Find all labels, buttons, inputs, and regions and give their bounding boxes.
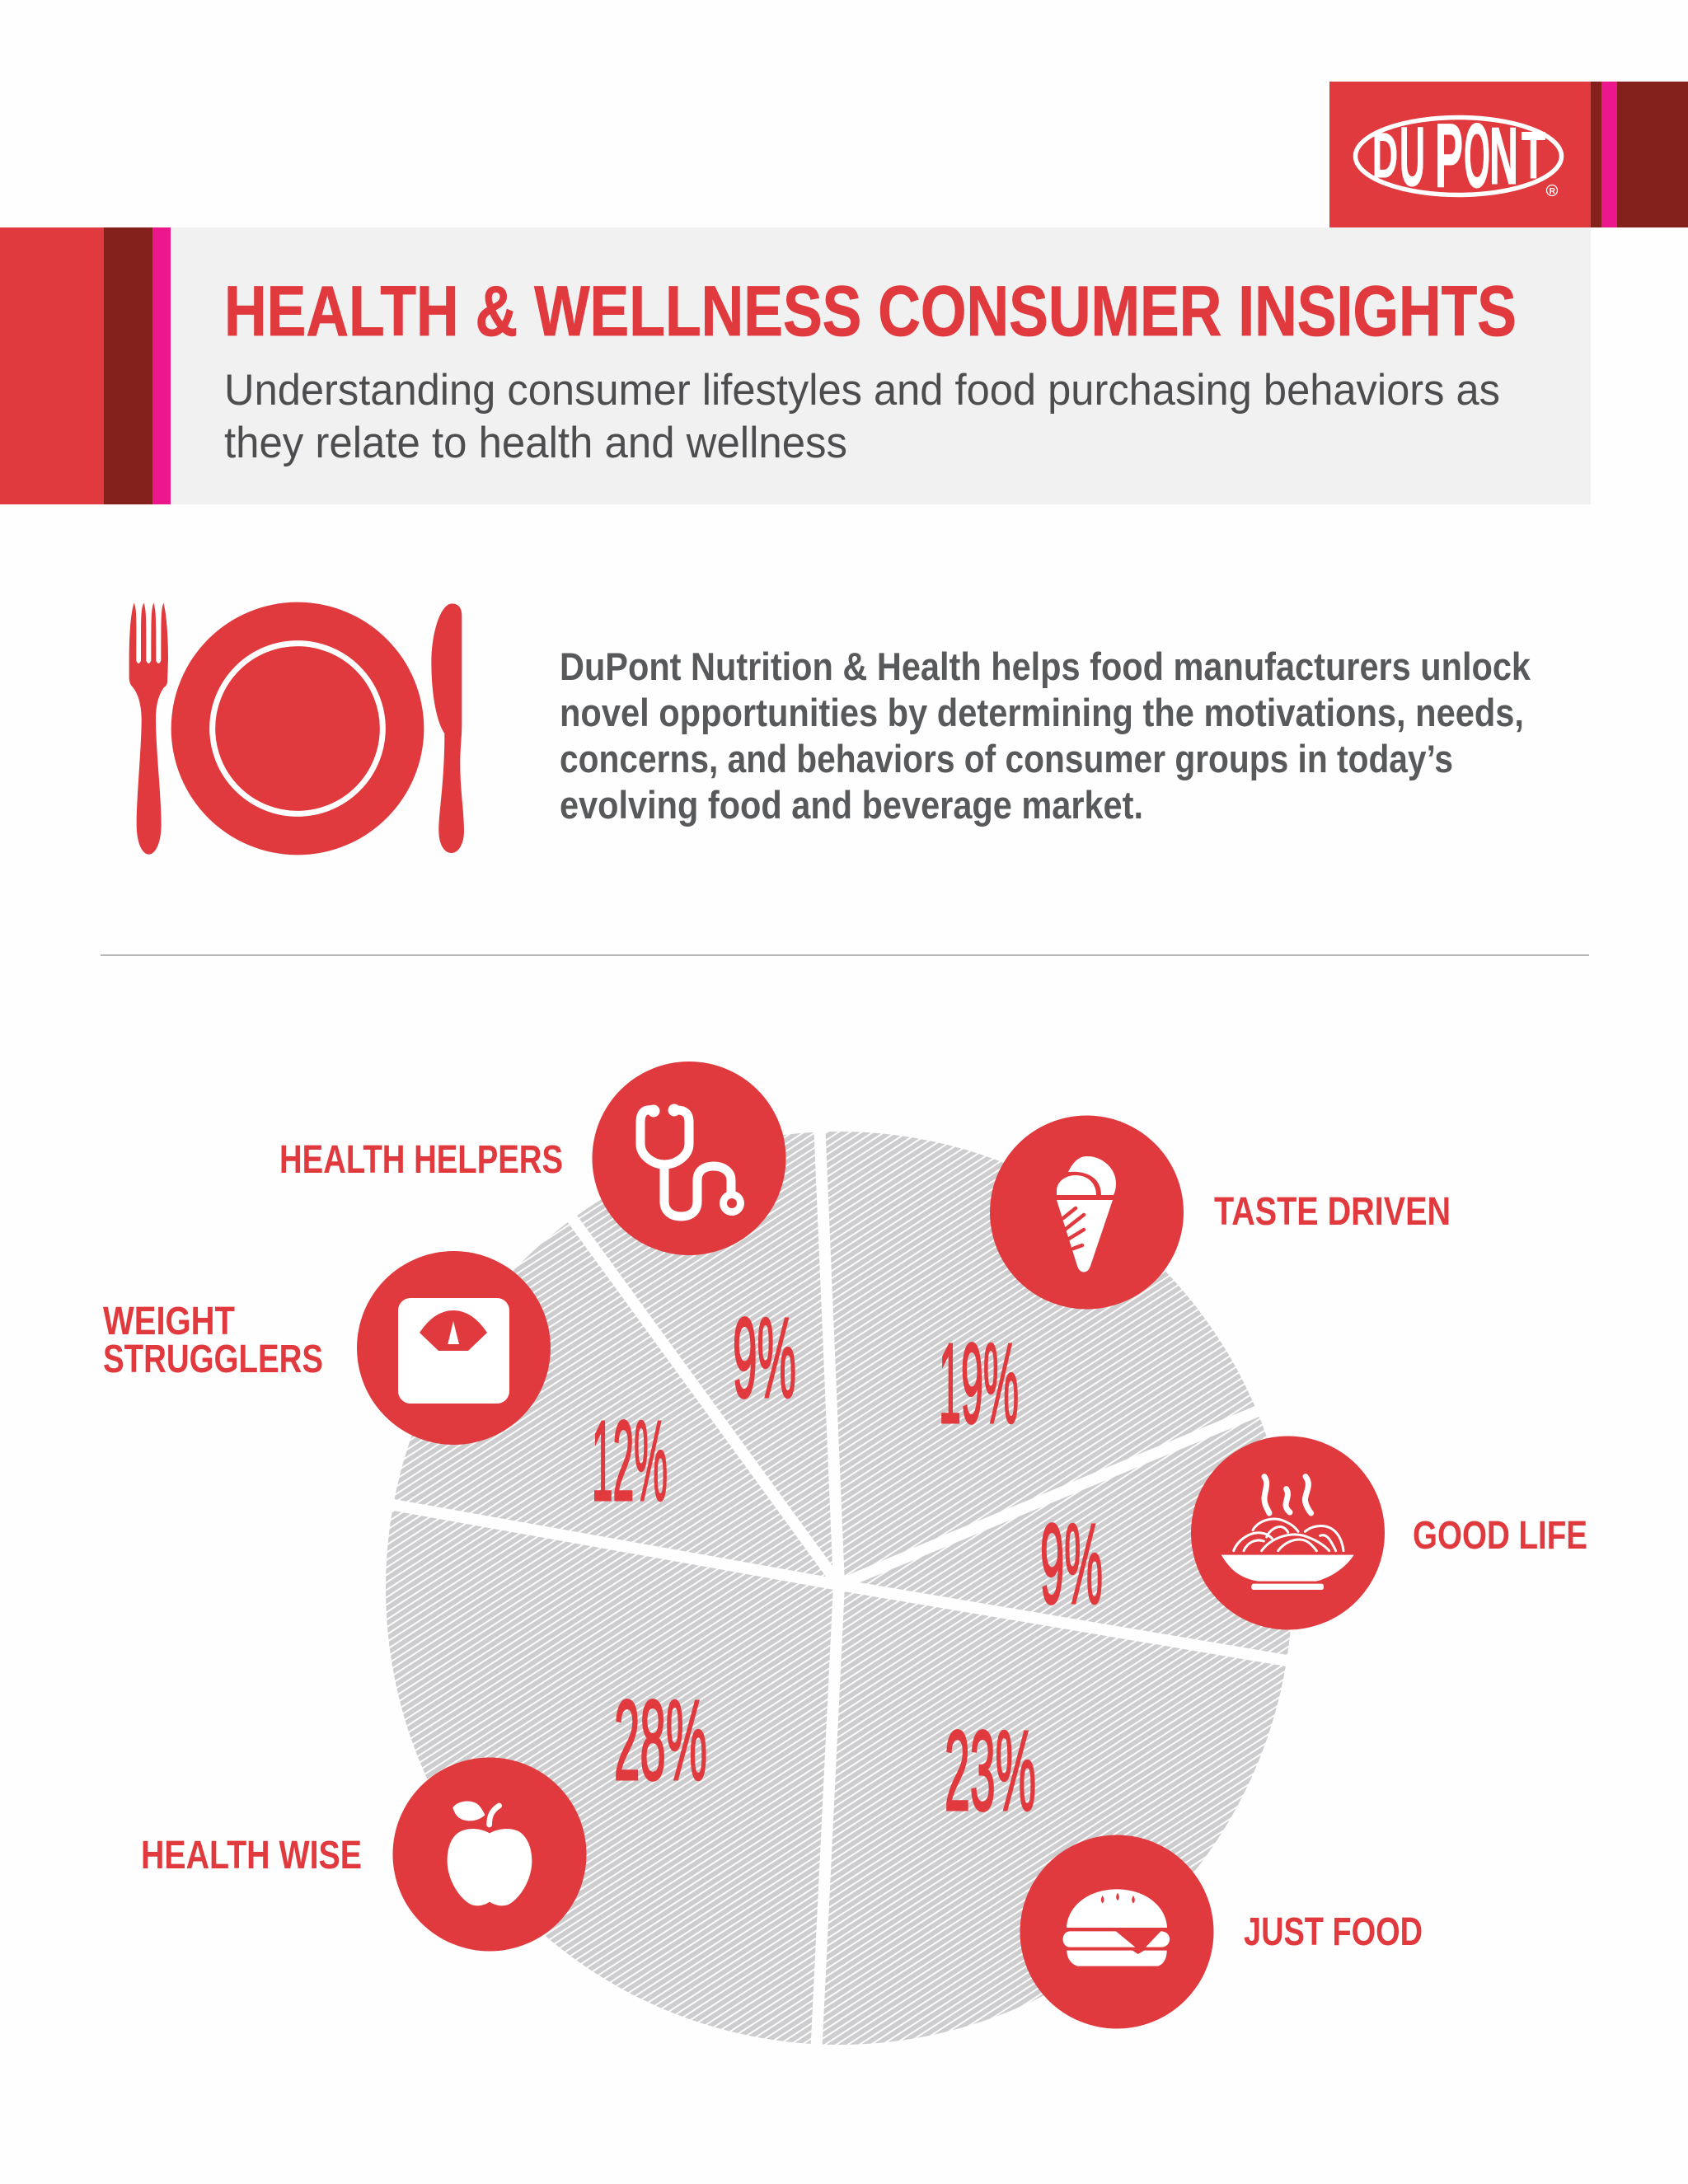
intro paragraph: concerns, and behaviors of consumer groups in today’s <box>560 737 1453 780</box>
DuPont oval logo <box>1355 105 1561 207</box>
pie chart <box>375 1121 1306 2056</box>
label: weight strugglers: WEIGHT <box>103 1300 235 1343</box>
icon: ice cream <box>990 1116 1184 1309</box>
pie chart: 9% <box>733 1295 796 1422</box>
pie chart: 12% <box>592 1398 668 1525</box>
pie chart: 23% <box>945 1708 1036 1835</box>
subtitle: Understanding consumer lifestyles and food purchasing behaviors as <box>224 366 1500 415</box>
label: taste driven: TASTE DRIVEN <box>1214 1190 1451 1234</box>
icon: burger <box>1020 1835 1213 2029</box>
icon: bowl of noodles <box>1191 1436 1385 1630</box>
DuPont oval logo: P <box>1435 105 1463 207</box>
intro paragraph <box>560 644 1531 827</box>
label: health helpers: HEALTH HELPERS <box>279 1138 563 1182</box>
intro paragraph: evolving food and beverage market. <box>560 783 1143 827</box>
label: good life: GOOD LIFE <box>1413 1514 1587 1558</box>
logo panel <box>1329 82 1688 227</box>
DuPont oval logo: U <box>1400 110 1425 204</box>
subtitle: they relate to health and wellness <box>224 419 847 467</box>
subtitle <box>224 366 1500 467</box>
icon: apple <box>392 1757 587 1952</box>
label: weight strugglers <box>103 1300 323 1381</box>
icon: stethoscope <box>592 1062 786 1255</box>
pie chart: 28% <box>614 1677 707 1804</box>
title banner <box>0 227 1591 504</box>
DuPont oval logo: D <box>1372 120 1398 191</box>
pie chart: 9% <box>1040 1501 1103 1628</box>
DuPont oval logo: N <box>1489 110 1518 201</box>
DuPont oval logo: O <box>1464 105 1490 207</box>
label: health wise: HEALTH WISE <box>141 1834 362 1877</box>
intro paragraph: novel opportunities by determining the motivations, needs, <box>560 691 1524 734</box>
intro paragraph: DuPont Nutrition & Health helps food manufacturers unlock <box>560 644 1531 688</box>
pie chart: 19% <box>939 1320 1019 1447</box>
icon: weight scale <box>357 1251 551 1445</box>
label: just food: JUST FOOD <box>1244 1910 1423 1954</box>
DuPont oval logo: R <box>1550 186 1556 196</box>
label: weight strugglers: STRUGGLERS <box>103 1338 323 1381</box>
icon: plate with fork and knife <box>129 602 464 855</box>
DuPont oval logo: T <box>1522 119 1545 193</box>
